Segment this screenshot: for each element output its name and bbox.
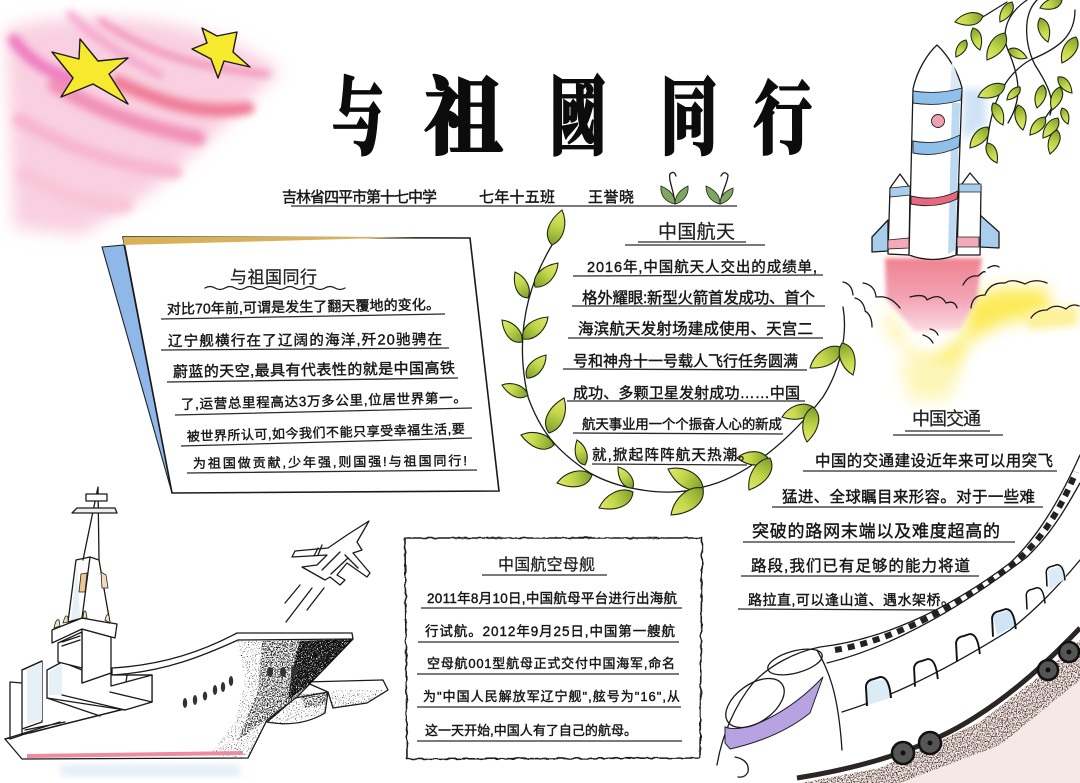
- body text: [167, 296, 467, 471]
- body text: 为祖国做贡献,少年强,则国强!与祖国同行!: [193, 453, 467, 471]
- waterline: [27, 751, 243, 758]
- body text: 中国的交通建设近年来可以用突飞: [815, 452, 1053, 470]
- title: 行: [754, 78, 812, 165]
- title: 國: [550, 71, 606, 166]
- title: 同: [660, 72, 718, 166]
- icon: large star: [52, 39, 128, 104]
- byline: school, class, author: 吉林省四平市第十七中学: [282, 188, 437, 206]
- superstructure: [5, 487, 152, 739]
- rear ship section: [305, 680, 388, 708]
- panel heading: 中国交通: [912, 409, 981, 429]
- body text: [423, 591, 680, 738]
- exhaust clouds: [843, 266, 1079, 343]
- body text: 航天事业用一个个振奋人心的新成: [582, 417, 782, 432]
- title: 祖: [424, 72, 504, 165]
- body text: 突破的路网末端以及难度超高的: [752, 522, 1000, 541]
- body text: 为"中国人民解放军辽宁舰",舷号为"16",从: [423, 689, 680, 704]
- title: 与: [332, 74, 384, 166]
- panel heading: 中国航天: [658, 221, 735, 243]
- body text: 2016年,中国航天人交出的成绩单,: [587, 258, 817, 276]
- left booster: [888, 174, 910, 255]
- flight deck lines: [5, 639, 353, 739]
- panel heading: 中国航空母舰: [498, 556, 595, 574]
- icon: small star: [192, 28, 250, 78]
- train body: [717, 455, 1080, 783]
- gold page edge: [123, 237, 420, 245]
- body text: 被世界所认可,如今我们不能只享受幸福生活,要: [187, 421, 465, 444]
- body text: 辽宁舰横行在了辽阔的海洋,歼20驰骋在: [168, 331, 442, 350]
- sky smudge: [963, 88, 986, 140]
- purple stripe: [725, 677, 823, 749]
- body text: 这一天开始,中国人有了自己的航母。: [425, 723, 637, 738]
- blue page edge: [102, 245, 172, 493]
- yellow exhaust: [884, 288, 1050, 375]
- byline: school, class, author: 七年十五班: [479, 189, 555, 206]
- body text: [573, 258, 817, 464]
- illustration: rocket launch: [843, 45, 1079, 400]
- icon: jet fighter: [285, 521, 370, 622]
- pink exhaust: [885, 258, 982, 332]
- body text: 2011年8月10日,中国航母平台进行出海航: [427, 591, 678, 606]
- wheels: [892, 642, 1079, 764]
- mast: [83, 487, 99, 560]
- body text: 格外耀眼:新型火箭首发成功、首个: [582, 288, 815, 307]
- roof vents: [835, 472, 1076, 650]
- icon: sprouts: [661, 172, 733, 204]
- body text: 蔚蓝的天空,最具有代表性的就是中国高铁: [173, 360, 455, 381]
- right booster: [957, 173, 981, 255]
- porthole: [932, 114, 944, 128]
- undercarriage: [797, 628, 1080, 778]
- laurel wreath: [497, 208, 860, 522]
- panel: 与祖国同行: [102, 237, 499, 493]
- title: [332, 71, 812, 166]
- body text: 对比70年前,可谓是发生了翻天覆地的变化。: [167, 296, 440, 317]
- body text: 空母航001型航母正式交付中国海军,命名: [427, 656, 675, 671]
- panel heading: 与祖国同行: [230, 268, 317, 287]
- body text: 就,掀起阵阵航天热潮。: [592, 447, 753, 464]
- illustration: high-speed train: [717, 455, 1080, 783]
- portholes: [183, 666, 297, 708]
- byline: school, class, author: 王誉晓: [588, 189, 634, 206]
- body text: 路拉直,可以逢山道、遇水架桥。: [748, 592, 955, 608]
- body text: 了,运营总里程高达3万多公里,位居世界第一。: [181, 389, 467, 412]
- panel: 中国交通: [738, 409, 1057, 610]
- fins: [872, 220, 888, 252]
- byline: school, class, author: [282, 188, 737, 206]
- body text: 路段,我们已有足够的能力将道: [751, 557, 970, 575]
- illustration: willow branches: [953, 0, 1080, 165]
- body text: 海滨航天发射场建成使用、天宫二: [578, 320, 813, 338]
- body text: 行试航。2012年9月25日,中国第一艘航: [425, 623, 676, 639]
- windows: [866, 565, 1066, 706]
- panel: 中国航天: [563, 221, 825, 465]
- hull: [5, 633, 353, 759]
- speed lines: [285, 585, 324, 622]
- main body: [909, 45, 962, 260]
- body text: 成功、多颗卫星发射成功……中国: [573, 385, 800, 402]
- panel: 中国航空母舰: [405, 538, 702, 759]
- nose lines: [817, 560, 1080, 750]
- illustration: aircraft carrier: [5, 487, 388, 776]
- ground: [800, 640, 1080, 783]
- water tint: [60, 765, 240, 776]
- body text: [748, 452, 1053, 608]
- flag: pink painted flag with stars: [6, 14, 280, 235]
- body text: 猛进、全球瞩目来形容。对于一些难: [782, 488, 1035, 506]
- hull shading: [210, 639, 353, 758]
- body text: 号和神舟十一号载人飞行任务圆满: [573, 353, 798, 370]
